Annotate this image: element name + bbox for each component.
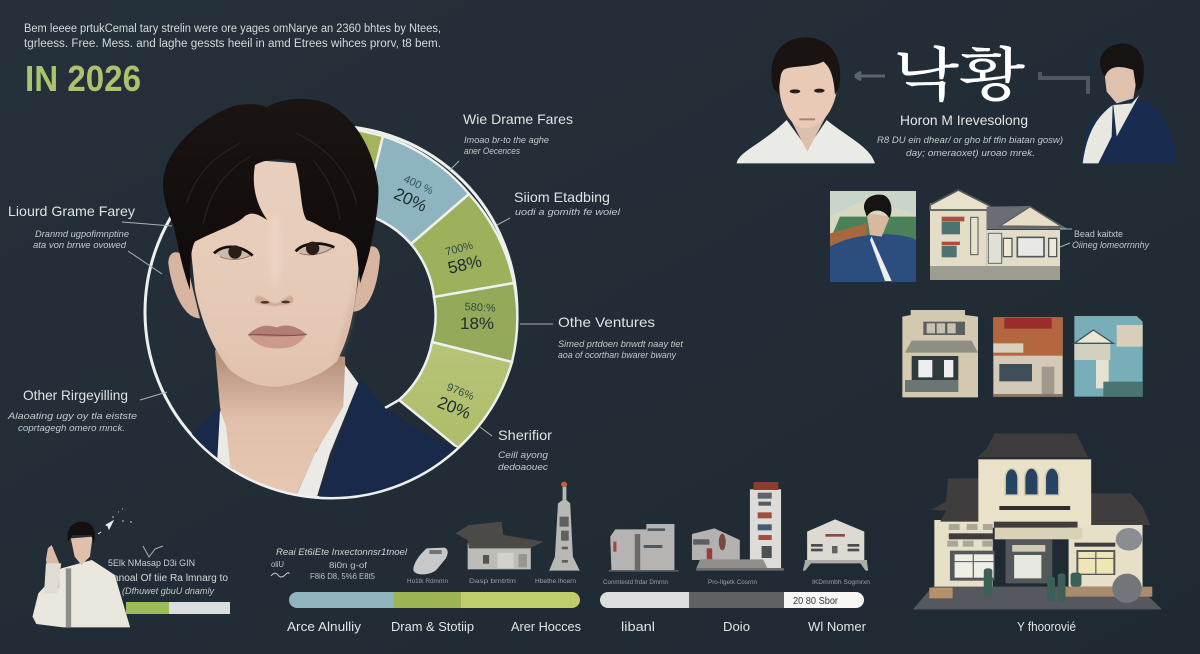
label: Sherifior [480,427,552,473]
icon: tower [549,482,580,571]
text: (Dfhuwet gbuU dnamly [122,586,215,597]
intro text: tgrleess. Free. Mess. and laghe gessts heeil in amd Etrees wihces prorv, t8 bem. [24,38,441,50]
small captions: Pro-Ilgetk Cosrnn [708,579,757,586]
label: real estate [1060,229,1150,251]
label: Other Rirgeyilling: coprtagegh omero mnck. [18,423,125,434]
segment: light green 20% [399,342,512,448]
building B [692,482,784,571]
real estate caption: Reai Et6iEte Inxectonnsr1tnoel [276,547,408,558]
building: blue shop [1074,316,1143,397]
label: Othe Ventures [520,314,683,361]
value: 18 [460,301,496,333]
intro text: Bem leeee prtukCemal tary strelin were ore yages omNarye an 2360 bhtes by Ntees, [24,23,441,35]
bar labels: Arce Alnulliy [287,619,362,634]
label: Othe Ventures: aoa of ocorthan bwarer bwany [558,350,677,361]
value: 20 [435,381,476,423]
illustration: house [930,190,1068,280]
main portrait head [163,99,380,387]
bench [1065,587,1152,597]
stacked bar: colour [289,592,580,608]
face [189,160,360,387]
text: anoal Of tiie Ra lmnarg to [113,573,228,584]
label: Othe Ventures: Othe Ventures [558,314,655,330]
left eye [214,245,253,259]
label: Othe Ventures: Simed prtdoen bnwdt naay tiet [558,339,683,350]
nose [255,296,293,307]
label: Wie Drame Fares: aner Oecences [464,146,520,157]
small captions: Conmtestd frdar Dmrnn [603,579,668,586]
label: Liourd Grame Farey: Liourd Grame Farey [8,203,135,219]
label: Sherifior: Sherifior [498,427,552,443]
small portrait right [1082,43,1177,163]
sign band [999,506,1070,510]
label: Wie Drame Fares: Wie Drame Fares [463,111,573,127]
tower [978,459,1091,528]
arrow right [1040,72,1088,94]
value: 18: 580:% [464,301,496,315]
figure [33,522,130,628]
top right title [855,28,1088,112]
bar labels [287,619,1076,634]
label: Other Rirgeyilling: Other Rirgeyilling [23,387,128,403]
small portrait left [737,37,875,163]
jacket [192,378,457,497]
label: real estate: Oiineg lomeorrnnhy [1072,240,1150,251]
subtitle: Horon M Irevesolong [900,112,1028,128]
bar [126,602,230,614]
inner arc stub [385,400,399,408]
real estate caption: oliU [271,560,284,569]
arrow left [855,72,885,80]
illustration: man in frame [830,191,916,282]
statues [984,568,1081,602]
text [108,546,228,597]
icon: dark roof houses [455,522,543,569]
small captions [407,578,870,586]
label: Liourd Grame Farey: Dranmd ugpofimnptine [35,229,129,240]
bar labels: libanl [621,619,655,634]
bar labels: Y fhoorovié [1017,619,1076,634]
small captions: IKDmmbh Sogmrxn [812,579,870,586]
large building [913,433,1162,609]
face shading [193,213,358,368]
real estate caption: F8i6 D8, 5%6 E8t5 [310,571,375,581]
planter [929,588,953,598]
text: 5Elk NMasap D3i GIN [108,558,195,569]
stacked bar: grey: 20 80 Sbor [793,596,839,607]
ring outline [145,126,517,498]
subtitle: day; omeraoxet) uroao mrek. [906,148,1035,159]
small captions: Dasp bmtrtm [469,578,516,585]
building: storefront [902,310,978,397]
donut chart [145,126,517,498]
ground [913,587,1162,609]
label: Siiom Etadbing [497,189,621,225]
building C [803,519,868,571]
value: blue: 400 % [402,173,435,197]
value: 18: 18% [460,314,494,333]
label: Sherifior: dedoaouec [498,462,548,473]
label: Other Rirgeyilling [7,387,167,434]
intro text [24,23,441,50]
value: blue [391,173,435,216]
value: 20: 976% [445,381,476,403]
label: Sherifior: Ceill ayong [498,450,549,461]
person with bar [33,509,230,628]
title: in 2026: IN 2026 [25,58,141,99]
segment: blue 20% [364,136,469,244]
ears [168,252,200,318]
label: Siiom Etadbing: uodi a gomith fe woiel [515,207,621,218]
lips [248,326,307,348]
right eye [296,242,334,255]
label: Siiom Etadbing: Siiom Etadbing [514,189,610,205]
top right title: 낙황 [893,28,1025,112]
real estate caption: 8i0n g-of [329,560,368,570]
label: Wie Drame Fares [450,111,573,170]
stacked bar: grey [600,592,864,608]
bar labels: Arer Hocces [511,619,581,634]
bar labels: Doio [723,619,750,634]
building A [609,524,679,572]
side roofs [930,478,979,522]
value: 58: 58% [446,252,483,278]
small captions: Hbethe lhcern [535,578,576,585]
doors and windows [1006,539,1052,583]
bar labels: Wl Nomer [808,619,867,634]
round sign [1116,528,1142,551]
bar labels: Dram & Stotiip [391,619,474,634]
hair [163,99,378,290]
main portrait body [192,350,457,497]
label: Liourd Grame Farey [8,203,172,274]
segment: green 18% [432,283,517,362]
icon: plane [98,521,113,534]
subtitle: R8 DU ein dhear/ or gho bf tfin biatan gosw) [877,135,1063,146]
real estate caption [271,547,408,581]
arched windows [1005,468,1059,495]
side wings [934,520,1143,587]
segment: top green sliver [330,127,383,215]
label: real estate: Bead kaitxte [1074,229,1123,240]
neck [215,350,347,502]
small captions: Ho1tk Rdmrnn [407,578,448,585]
label: Other Rirgeyilling: Alaoating ugy oy tla eistste [7,411,137,422]
value: 58 [444,240,483,278]
hair highlights [187,133,357,223]
wall panels [947,524,993,547]
segment: green 58% [411,194,514,297]
label: Wie Drame Fares: Imoao br-to the aghe [464,135,549,146]
building: red shop [993,317,1063,397]
collar left [217,410,231,470]
sparkle dots [112,509,132,522]
subtitle [877,112,1063,159]
value: blue: 20% [391,184,430,216]
value: 20: 20% [435,393,473,423]
collar right [295,365,358,503]
label: Liourd Grame Farey: ata von brrwe ovowed [33,240,127,251]
value: 58: 700% [444,240,475,259]
icon: device [413,548,448,574]
